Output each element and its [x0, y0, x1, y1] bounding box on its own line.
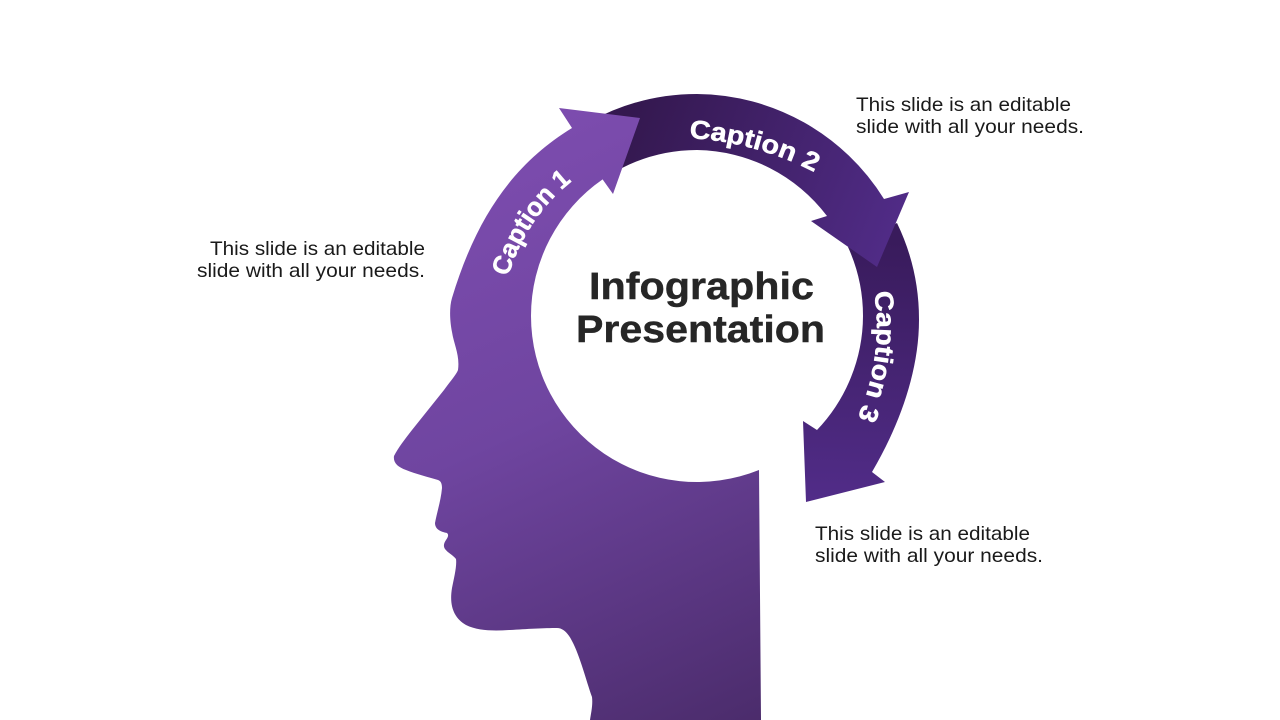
- title: [576, 266, 825, 351]
- text block: caption 1 description: [197, 238, 425, 282]
- text block: caption 3 description: This slide is an editable: [815, 523, 1030, 545]
- text block: caption 2 description: [856, 94, 1084, 138]
- text block: caption 2 description: slide with all your needs.: [856, 116, 1084, 138]
- text block: caption 1 description: slide with all your needs.: [197, 260, 425, 282]
- text block: caption 3 description: [815, 523, 1043, 567]
- arrow: caption 2: [605, 94, 909, 267]
- text block: caption 3 description: slide with all your needs.: [815, 545, 1043, 567]
- text block: caption 2 description: This slide is an editable: [856, 94, 1071, 116]
- caption 1 label: Caption 1: [493, 170, 572, 274]
- head silhouette with arrow: caption 1: [394, 108, 761, 720]
- text block: caption 1 description: This slide is an editable: [210, 238, 425, 260]
- arrow: caption 3: [803, 223, 919, 502]
- title: Infographic: [589, 266, 814, 308]
- title: Presentation: [576, 309, 825, 351]
- caption 2 label: Caption 2: [690, 120, 820, 172]
- caption 3 label: Caption 3: [859, 292, 894, 422]
